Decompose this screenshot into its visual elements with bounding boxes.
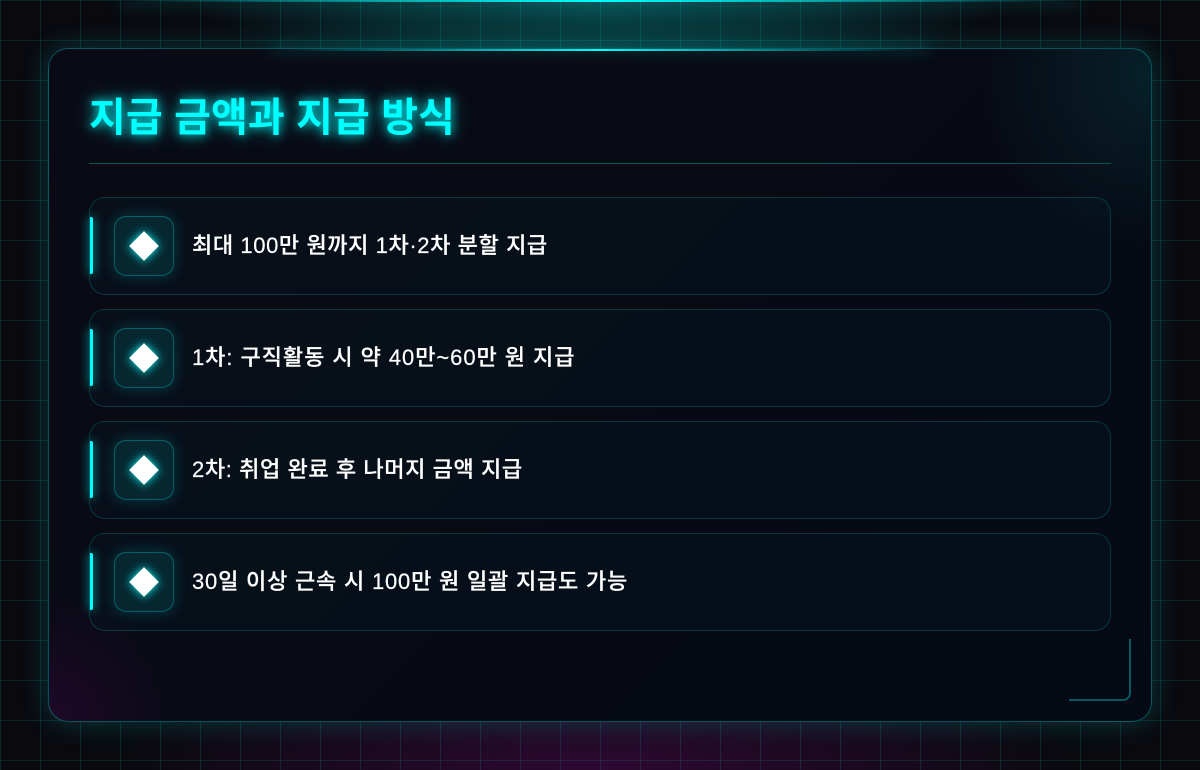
accent bar — [90, 553, 93, 610]
corner bracket — [1069, 639, 1131, 701]
list item 1 — [89, 197, 1111, 295]
icon: diamond — [114, 440, 174, 500]
accent bar — [90, 329, 93, 386]
item text: 최대 100만 원까지 1차·2차 분할 지급 — [192, 233, 548, 258]
bottom magenta glow — [120, 660, 1080, 770]
top neon glow line — [120, 0, 1080, 2]
item text: 1차: 구직활동 시 약 40만~60만 원 지급 — [192, 345, 575, 370]
icon: diamond — [114, 328, 174, 388]
card top glow line — [269, 49, 931, 51]
item text: 30일 이상 근속 시 100만 원 일괄 지급도 가능 — [192, 569, 628, 594]
accent bar — [90, 441, 93, 498]
list item 4 — [89, 533, 1111, 631]
list item 3 — [89, 421, 1111, 519]
title: 지급 금액과 지급 방식 — [89, 85, 455, 143]
icon: diamond — [114, 216, 174, 276]
icon: diamond — [114, 552, 174, 612]
item text: 2차: 취업 완료 후 나머지 금액 지급 — [192, 457, 523, 482]
list item 2 — [89, 309, 1111, 407]
accent bar — [90, 217, 93, 274]
